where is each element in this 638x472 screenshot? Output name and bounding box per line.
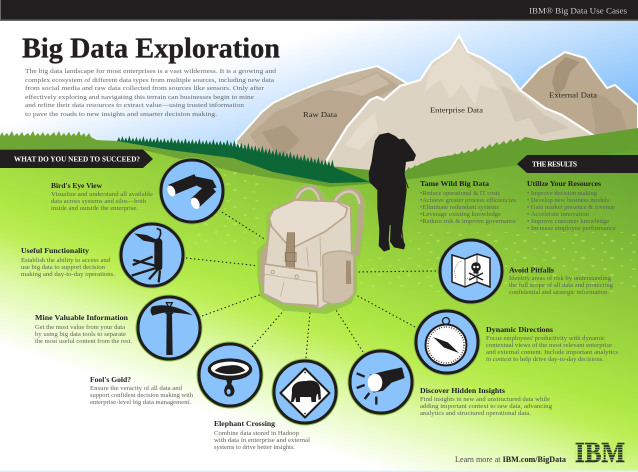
mountain: external data <box>520 52 638 150</box>
text: tame wild big data: •Reduce risk & improve governance <box>420 218 516 225</box>
icon: flashlight <box>348 348 414 416</box>
text: dynamic directions: and external content. Include important analytics <box>486 349 618 356</box>
text: tame wild big data: •Leverage existing knowledge <box>420 211 501 218</box>
intro text <box>25 68 277 118</box>
text: tame wild big data: •Achieve greater process efficiencies <box>420 197 516 204</box>
dotted connectors <box>186 212 436 358</box>
bottom edge <box>0 470 638 472</box>
text: avoid pitfalls: Avoid Pitfalls <box>509 266 554 274</box>
text: fool's gold <box>90 375 194 406</box>
text: elephant crossing: Elephant Crossing <box>214 419 275 428</box>
intro text: from social media and raw data collected from sources like sensors. Only after <box>25 85 265 92</box>
icon: treasure map <box>438 238 504 304</box>
text: utilize your resources: Utilize Your Resources <box>527 179 601 188</box>
text: dynamic directions: in context to help drive day-to-day decisions. <box>486 356 604 363</box>
text: discover hidden insights: Discover Hidden Insights <box>420 386 505 395</box>
text: tame wild big data: Tame Wild Big Data <box>420 179 489 188</box>
label: raw data: Raw Data <box>303 111 338 119</box>
text: bird's eye view: data across systems and silos—both <box>51 198 147 205</box>
sky background <box>0 0 638 200</box>
icon: pickaxe <box>136 294 202 362</box>
text: mine valuable information: by using big data tools to separate <box>35 331 126 338</box>
tree line <box>117 135 370 183</box>
text: fool's gold: support confident decision making with <box>90 392 194 399</box>
icon: gold pan <box>196 342 264 408</box>
icon: compass <box>414 308 480 376</box>
backpack <box>257 184 366 314</box>
text: mine valuable information <box>35 313 132 345</box>
text: fool's gold: Ensure the veracity of all data and <box>90 385 183 392</box>
text: bird's eye view: Bird's Eye View <box>51 181 102 190</box>
intro text: The big data landscape for most enterprises is a vast wilderness. It is a growing and <box>25 68 277 75</box>
mountain: enterprise data <box>320 36 593 200</box>
text: utilize your resources: • Gain market presence & revenue <box>527 204 615 211</box>
text: useful functionality: Establish the ability to access and <box>21 257 111 264</box>
text: avoid pitfalls: the full scope of all data and protecting <box>509 282 614 289</box>
text: dynamic directions: contextual views of the most relevant enterprise <box>486 342 612 349</box>
tag: the results <box>517 155 638 173</box>
tag: what do you need to succeed: WHAT DO YOU NEED TO SUCCEED? <box>14 156 140 164</box>
flap <box>269 200 347 248</box>
header label: IBM® Big Data Use Cases <box>529 6 627 16</box>
header bar <box>0 0 638 21</box>
hillside <box>0 128 638 200</box>
intro text: and refine their data resources to extract value—using trusted information <box>25 102 245 109</box>
meadow speckles <box>190 172 638 292</box>
icon: elephant crossing sign <box>272 358 338 426</box>
text: useful functionality: Useful Functionality <box>21 246 89 255</box>
top handle <box>297 187 322 205</box>
IBM logo: IBM <box>575 437 625 469</box>
text: utilize your resources: • Accelerate innovation <box>527 211 590 218</box>
text: mine valuable information: the most useful content from the rest. <box>35 338 132 345</box>
text: useful functionality: making and day-to-day operations. <box>21 271 115 278</box>
tag: what do you need to succeed <box>0 150 153 168</box>
intro text: effectively exploring and navigating this terrain can businesses begin to mine <box>25 94 254 101</box>
text: elephant crossing: with data in enterprise and external <box>214 437 310 444</box>
text: avoid pitfalls: Identify areas of risk by understanding <box>509 275 612 282</box>
text: discover hidden insights: Find insights in new and unstructured data while <box>420 396 550 403</box>
back strap <box>334 190 361 256</box>
text: tame wild big data <box>420 179 516 225</box>
front pocket <box>263 264 318 306</box>
intro text: complex ecosystem of different data types from multiple sources, including new data <box>25 77 274 84</box>
text: utilize your resources: • Increase employee performance <box>527 225 616 232</box>
side pocket <box>323 251 354 304</box>
text: elephant crossing <box>214 419 310 451</box>
icon: binoculars <box>158 158 226 224</box>
text: fool's gold: Fool's Gold? <box>90 375 131 384</box>
text: mine valuable information: Get the most value from your data <box>35 324 125 331</box>
text: bird's eye view <box>51 181 153 212</box>
text: discover hidden insights: analytics and structured operational data. <box>420 410 531 417</box>
label: enterprise data: Enterprise Data <box>430 106 484 114</box>
text: utilize your resources: • Improve customer knowledge <box>527 218 609 225</box>
label: external data: External Data <box>549 92 598 100</box>
text: bird's eye view: inside and outside the enterprise. <box>51 205 138 212</box>
text: dynamic directions: Focus employees' productivity with dynamic <box>486 335 605 342</box>
text: elephant crossing: Combine data stored in Hadoop <box>214 430 299 437</box>
icon: pocket knife <box>118 222 186 288</box>
text: dynamic directions <box>486 325 618 363</box>
learn more link: Learn more at IBM.com/BigData <box>455 455 566 464</box>
text: discover hidden insights: adding important context to raw data, advancing <box>420 403 553 410</box>
text: mine valuable information: Mine Valuable Information <box>35 313 129 322</box>
text: tame wild big data: •Eliminate redundant systems <box>420 204 499 211</box>
backpack glow <box>257 184 366 314</box>
text: dynamic directions: Dynamic Directions <box>486 325 553 334</box>
intro text: to pave the roads to new insights and smarter decision making. <box>25 111 217 118</box>
text: avoid pitfalls <box>509 266 614 296</box>
text: discover hidden insights <box>420 386 553 417</box>
text: utilize your resources <box>527 179 616 232</box>
text: utilize your resources: • Improve decision making <box>527 190 598 197</box>
title: Big Data Exploration <box>22 34 280 64</box>
grass field <box>0 149 638 472</box>
tag: the results: THE RESULTS <box>532 160 577 168</box>
hiker silhouette <box>369 133 416 252</box>
text: tame wild big data: •Reduce operational & IT costs <box>420 190 500 197</box>
text: useful functionality <box>21 246 115 278</box>
left side pocket <box>260 243 268 287</box>
mountain: raw data <box>235 66 440 190</box>
text: fool's gold: enterprise-level big data management. <box>90 399 191 406</box>
text: useful functionality: use big data to support decision <box>21 264 106 271</box>
text: utilize your resources: • Develop new business models <box>527 197 609 204</box>
text: elephant crossing: systems to drive better insights. <box>214 444 295 451</box>
main body <box>264 202 353 308</box>
text: bird's eye view: Visualize and understand all available <box>51 191 153 198</box>
buckle strap <box>286 233 295 273</box>
text: avoid pitfalls: confidential and strategic information. <box>509 289 609 296</box>
